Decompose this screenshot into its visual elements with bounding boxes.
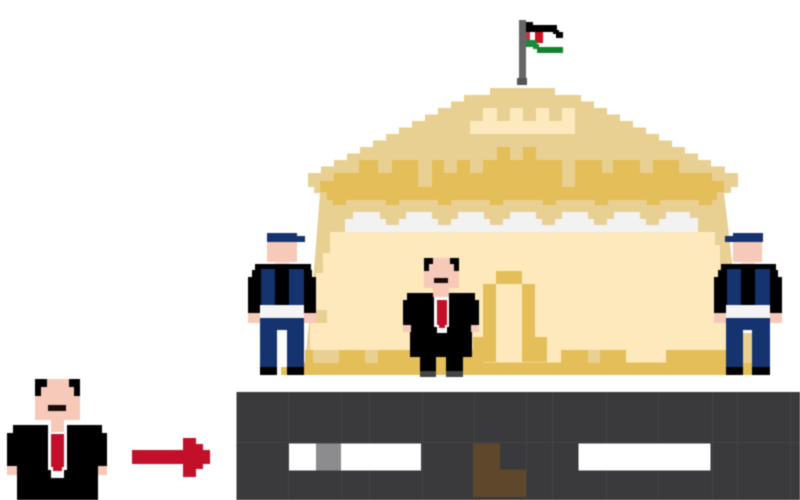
right guard (714, 233, 782, 375)
roof notches (418, 173, 575, 187)
gold crenellated band (320, 147, 724, 205)
foundation (281, 310, 752, 375)
dark building block (236, 392, 800, 500)
roof window (470, 108, 575, 134)
walls (305, 193, 738, 363)
arrow (132, 438, 210, 477)
grey window pane (316, 444, 341, 470)
brown doorway (473, 444, 526, 497)
large man in suit (7, 379, 107, 500)
left guard (248, 233, 316, 375)
scalloped white band (345, 212, 698, 232)
centre man in suit (403, 258, 479, 377)
tent building (281, 88, 752, 375)
door (473, 271, 547, 362)
wall interior (310, 232, 729, 363)
roof (308, 88, 738, 193)
right window (578, 444, 710, 470)
flag on pole (517, 20, 563, 85)
left window (289, 444, 421, 470)
